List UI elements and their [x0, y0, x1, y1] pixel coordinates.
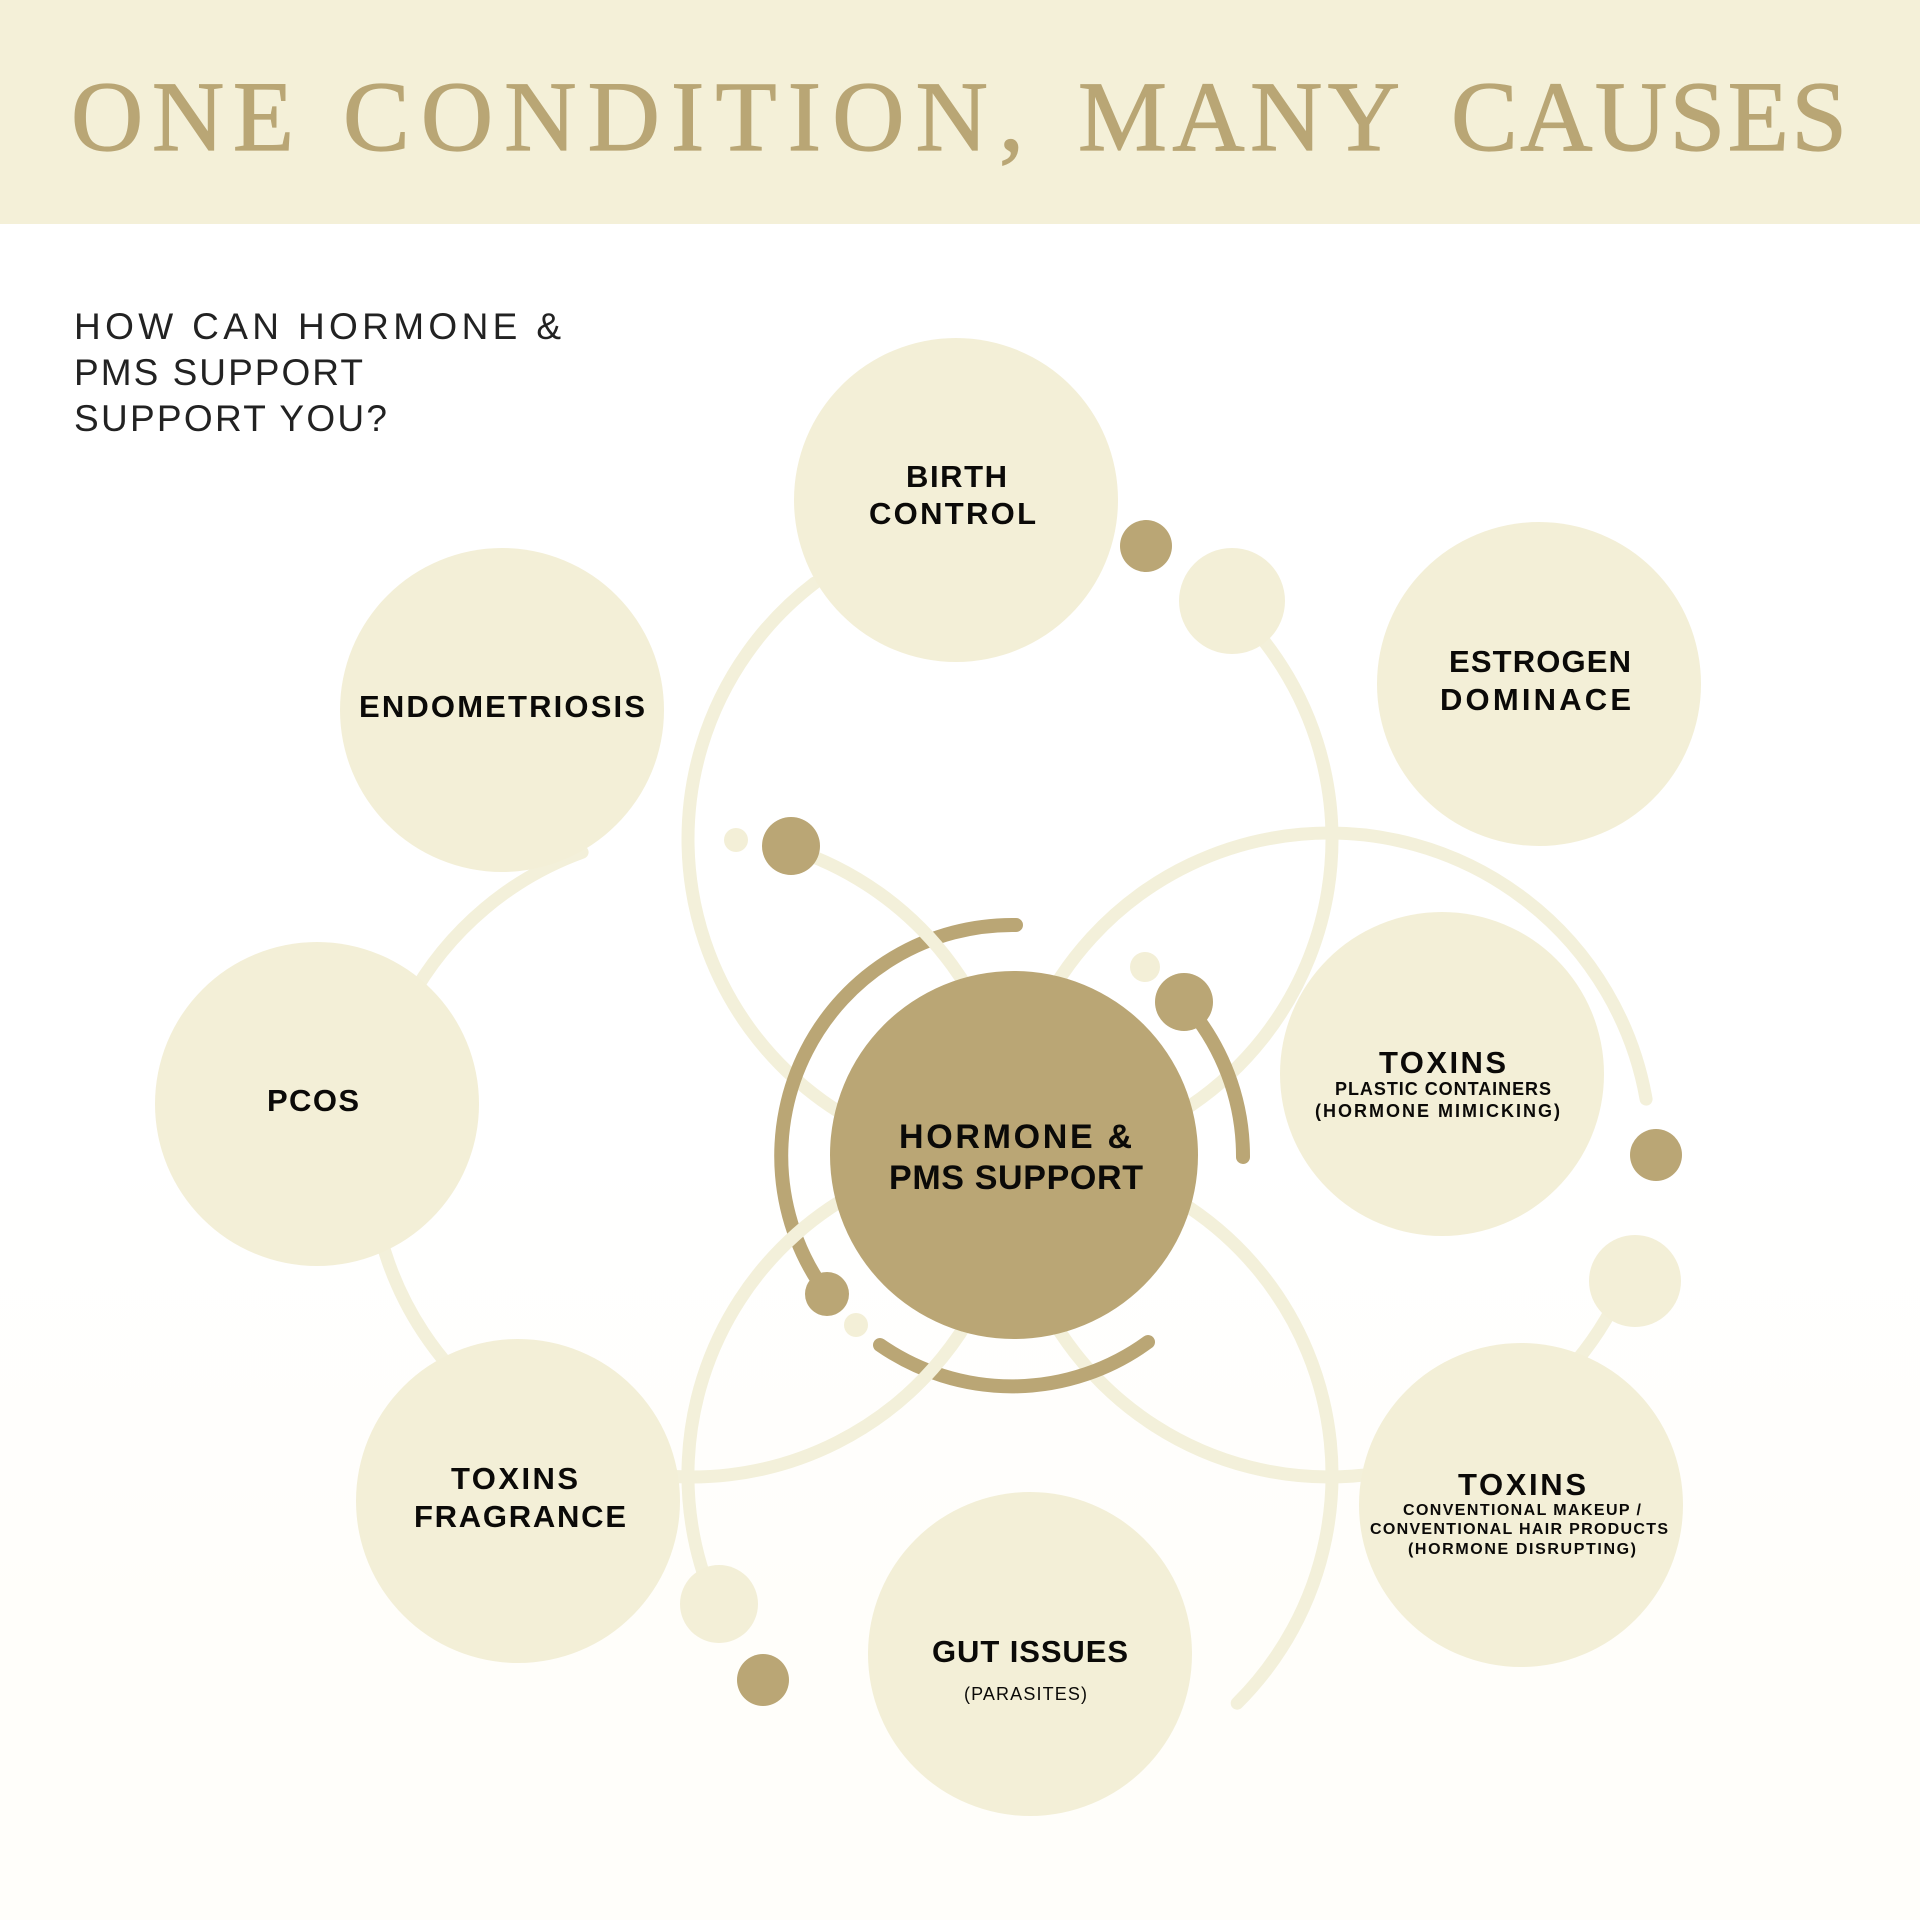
node: toxins makeup and hair products: CONVENTIONAL MAKEUP /: [1403, 1502, 1642, 1519]
node: birth control: CONTROL: [869, 496, 1036, 531]
node: toxins plastic containers: [1280, 912, 1604, 1236]
node: gut issues: (PARASITES): [964, 1684, 1087, 1704]
bronze ring: left segment: [781, 925, 1016, 1294]
central node: hormone and pms support: HORMONE &: [899, 1118, 1132, 1156]
node: toxins plastic containers: (HORMONE MIMICKING): [1315, 1101, 1560, 1121]
bronze ring: right segment: [1184, 1002, 1243, 1157]
node: toxins makeup and hair products: (HORMONE DISRUPTING): [1408, 1541, 1636, 1558]
title: ONE: [71, 61, 294, 172]
bronze ring: bottom segment: [880, 1342, 1148, 1386]
title: CONDITION,: [343, 61, 1024, 172]
node: birth control: [794, 338, 1118, 662]
node: toxins fragrance: FRAGRANCE: [414, 1499, 626, 1534]
node: pcos: PCOS: [267, 1083, 359, 1118]
intro question: HOW CAN HORMONE &: [74, 306, 561, 347]
node: estrogen dominance: [1377, 522, 1701, 846]
node: estrogen dominance: ESTROGEN: [1449, 644, 1631, 679]
node: endometriosis: [340, 548, 664, 872]
connecting orbit arcs: [688, 583, 1646, 1703]
title: MANY: [1078, 61, 1400, 172]
central node: hormone and pms support: PMS SUPPORT: [889, 1159, 1143, 1197]
node: toxins fragrance: TOXINS: [451, 1461, 578, 1496]
title: CAUSES: [1451, 61, 1847, 172]
title: [71, 61, 1847, 172]
node: birth control: BIRTH: [906, 459, 1007, 494]
node: toxins makeup and hair products: CONVENTIONAL HAIR PRODUCTS: [1370, 1521, 1668, 1538]
node: gut issues: [868, 1492, 1192, 1816]
intro question: PMS SUPPORT: [74, 352, 363, 393]
node: toxins makeup and hair products: TOXINS: [1458, 1467, 1586, 1502]
node: toxins makeup and hair products: [1359, 1343, 1683, 1667]
node: estrogen dominance: DOMINACE: [1440, 682, 1631, 717]
title banner: [0, 0, 1920, 224]
central node: hormone and pms support: [830, 971, 1198, 1339]
node: toxins plastic containers: TOXINS: [1379, 1045, 1506, 1080]
intro question: SUPPORT YOU?: [74, 398, 387, 439]
node: toxins fragrance: [356, 1339, 680, 1663]
node: pcos: [155, 942, 479, 1266]
intro question: [74, 306, 561, 439]
node: gut issues: GUT ISSUES: [932, 1634, 1128, 1669]
node: toxins plastic containers: PLASTIC CONTAINERS: [1335, 1079, 1551, 1099]
node: endometriosis: ENDOMETRIOSIS: [359, 689, 645, 724]
overlapping orbit arcs: [370, 848, 1014, 1606]
small accent dots: [680, 520, 1682, 1706]
